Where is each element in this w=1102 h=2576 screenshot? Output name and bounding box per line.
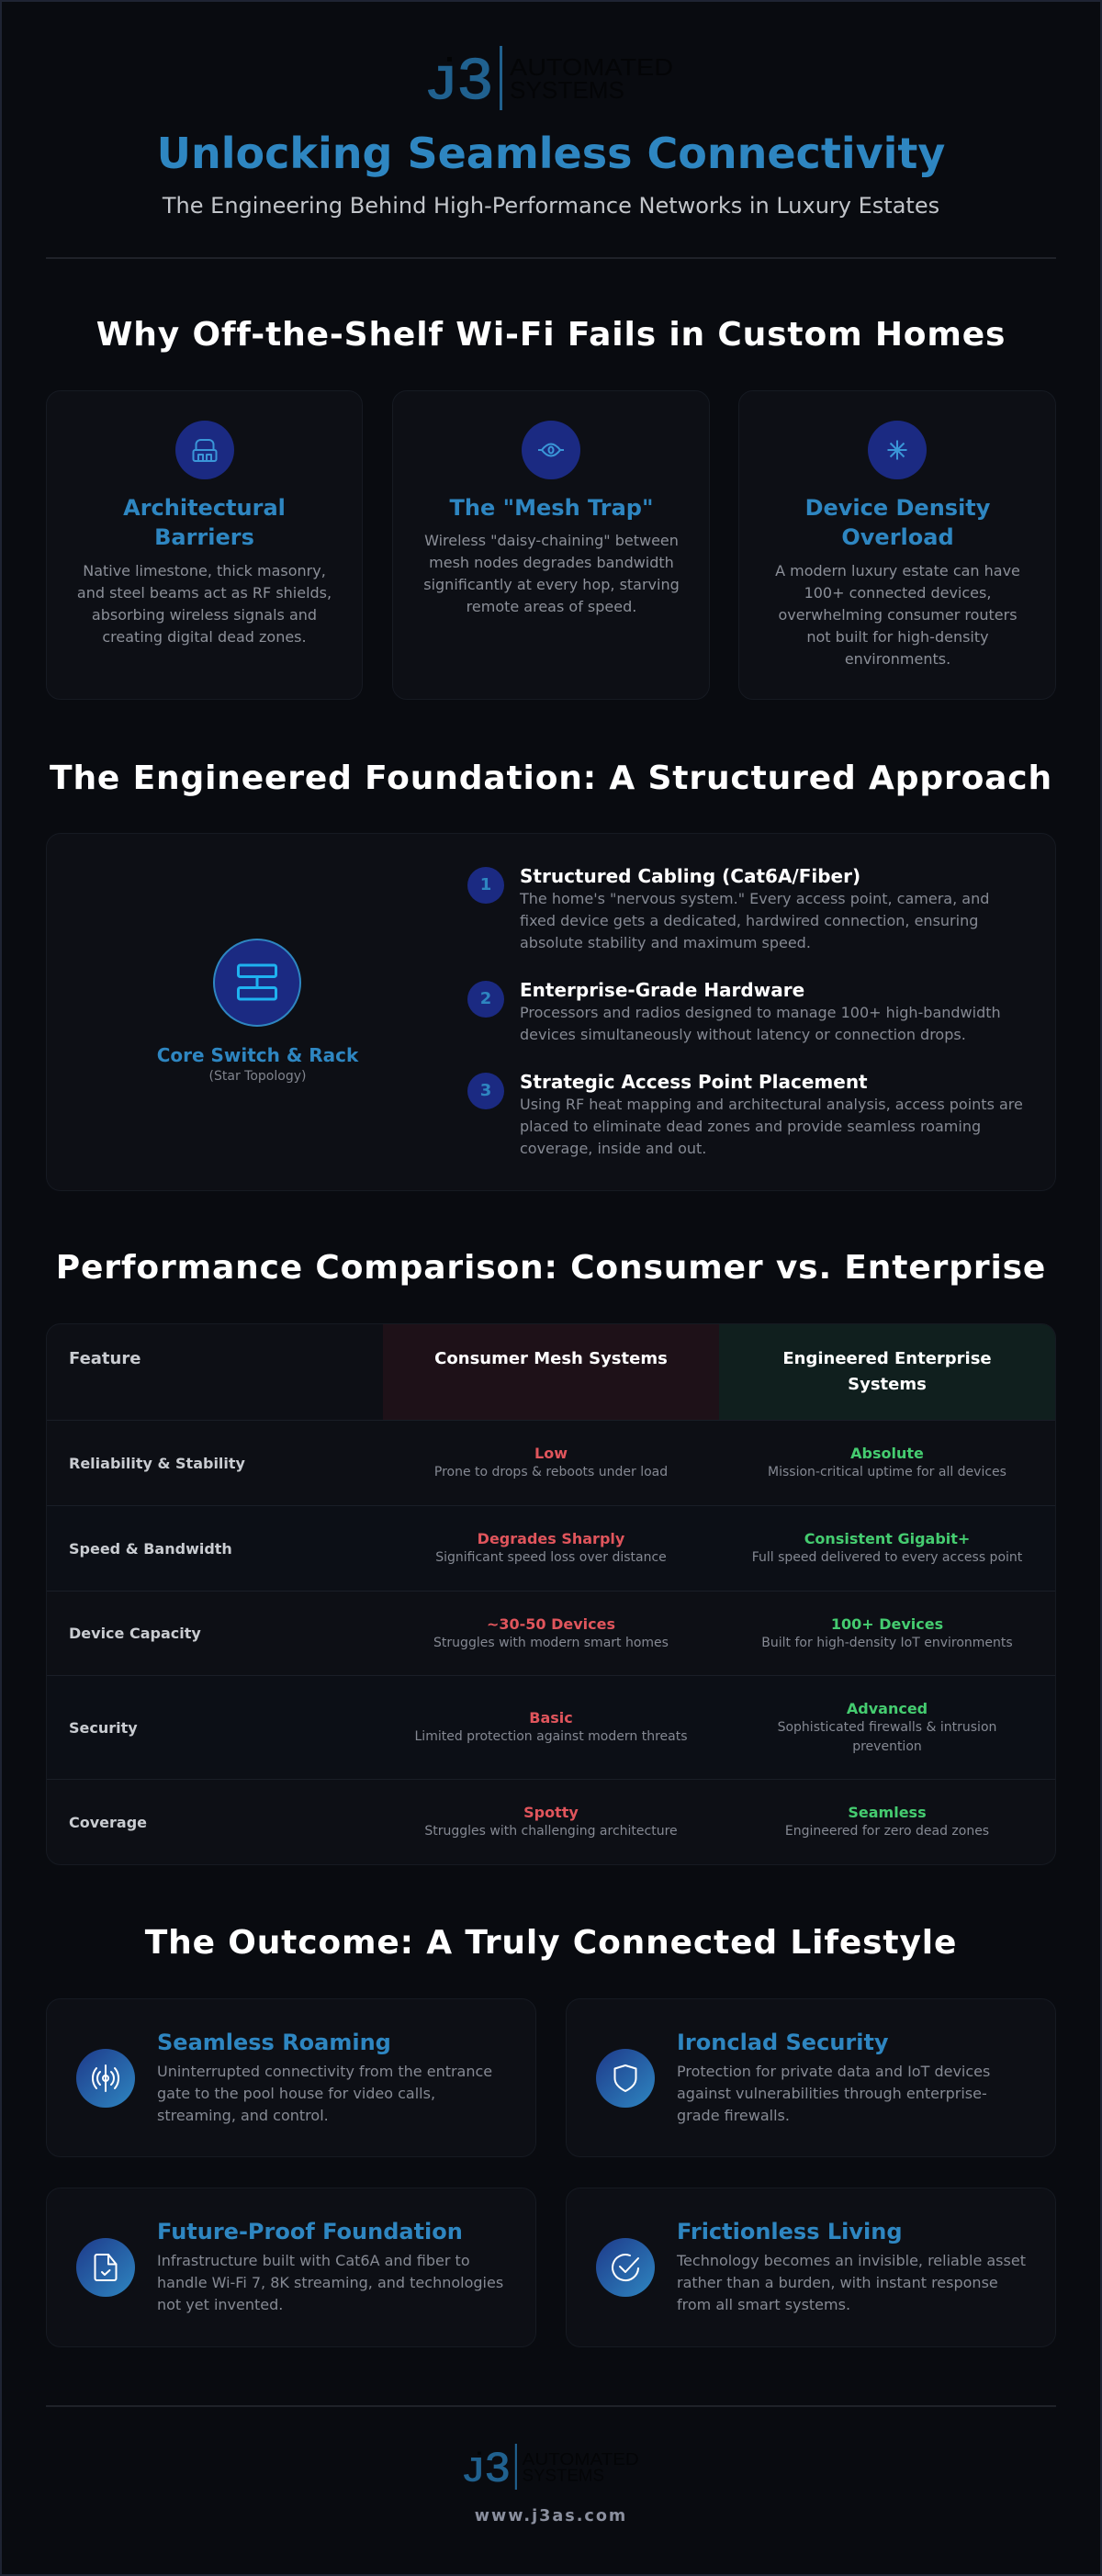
card text: not built for high-density <box>806 628 989 646</box>
card text: significantly at every hop, starving <box>423 576 680 593</box>
card text <box>423 532 680 615</box>
heading: engineered foundation: The Engineered Foundation: A Structured Approach <box>50 759 1052 797</box>
row: security: Sophisticated firewalls & intrusion <box>778 1719 996 1734</box>
step 1 text <box>520 890 989 951</box>
card text: grade firewalls. <box>677 2107 790 2124</box>
icon: eye <box>522 421 580 479</box>
card title: Frictionless Living <box>677 2219 903 2244</box>
panel: architectural barriers <box>46 390 363 700</box>
card title: Barriers <box>154 524 254 550</box>
logo: header: SYSTEMS <box>510 76 624 104</box>
card title: Device Density <box>805 495 990 521</box>
card text: creating digital dead zones. <box>102 628 307 646</box>
card text: against vulnerabilities through enterprise- <box>677 2085 987 2102</box>
card text: Protection for private data and IoT devices <box>677 2063 990 2080</box>
card text: streaming, and control. <box>157 2107 329 2124</box>
panel: seamless roaming <box>46 1998 536 2157</box>
logo: header <box>428 46 673 110</box>
card text: 100+ connected devices, <box>804 584 991 602</box>
table header <box>69 1324 1055 1420</box>
row: security: Basic <box>529 1709 573 1727</box>
card text: rather than a burden, with instant response <box>677 2274 998 2291</box>
step 3 number: 3 <box>480 1081 491 1100</box>
card title <box>805 495 990 550</box>
row: capacity: Struggles with modern smart homes <box>433 1635 669 1649</box>
step 2 number: 2 <box>480 989 491 1008</box>
card title <box>123 495 286 550</box>
row: reliability: Prone to drops & reboots under load <box>434 1465 668 1479</box>
logo: footer: 3 <box>486 2446 510 2490</box>
card title: Overload <box>841 524 954 550</box>
panel: structured approach <box>46 833 1056 1191</box>
row: coverage: Seamless <box>848 1804 927 1821</box>
row: speed: Degrades Sharply <box>478 1530 624 1547</box>
card text: Uninterrupted connectivity from the entrance <box>157 2063 492 2080</box>
card text <box>677 2063 990 2124</box>
row: capacity: Built for high-density IoT environments <box>761 1635 1013 1649</box>
icon: asterisk <box>868 421 927 479</box>
card text: from all smart systems. <box>677 2296 850 2313</box>
step 1 text: fixed device gets a dedicated, hardwired connection, ensuring <box>520 912 978 929</box>
icon: circle check <box>596 2238 655 2297</box>
panel: mesh trap <box>392 390 710 700</box>
step 3 title: Strategic Access Point Placement <box>520 1071 868 1093</box>
row: coverage: Coverage <box>69 1813 147 1831</box>
row: coverage: Engineered for zero dead zones <box>785 1824 989 1839</box>
card text: A modern luxury estate can have <box>775 562 1020 579</box>
card text <box>77 562 332 646</box>
step 3 text: placed to eliminate dead zones and provide seamless roaming <box>520 1118 981 1135</box>
card text: overwhelming consumer routers <box>778 606 1018 624</box>
header: enterprise <box>719 1324 1055 1420</box>
icon: shield <box>596 2049 655 2108</box>
step 2 number <box>467 981 504 1018</box>
row: coverage <box>47 1779 1055 1864</box>
panel: frictionless living <box>566 2188 1056 2347</box>
logo: footer: SYSTEMS <box>523 2466 604 2485</box>
card text <box>157 2063 492 2124</box>
card text: environments. <box>845 650 950 668</box>
card title: The "Mesh Trap" <box>450 495 653 521</box>
step 1 text: absolute stability and maximum speed. <box>520 934 811 951</box>
diagram label: Core Switch & Rack <box>157 1044 358 1066</box>
step 3 number <box>467 1073 504 1109</box>
card text <box>676 2252 1026 2313</box>
card text: mesh nodes degrades bandwidth <box>429 554 674 571</box>
row: speed: Full speed delivered to every access point <box>752 1550 1022 1565</box>
row: coverage: Spotty <box>523 1804 579 1821</box>
logo: footer <box>464 2444 639 2490</box>
logo: header: 3 <box>458 48 492 110</box>
header: feature: Feature <box>69 1349 141 1368</box>
step 2 text <box>520 1004 1001 1043</box>
step 1 text: The home's "nervous system." Every access point, camera, and <box>520 890 989 907</box>
card text: remote areas of speed. <box>467 598 636 615</box>
step 2 text: Processors and radios designed to manage 100+ high-bandwidth <box>520 1004 1001 1021</box>
row: reliability <box>47 1420 1055 1505</box>
card text: gate to the pool house for video calls, <box>157 2085 435 2102</box>
card title: Architectural <box>123 495 286 521</box>
row: speed: Significant speed loss over distance <box>435 1550 667 1565</box>
step 1 title: Structured Cabling (Cat6A/Fiber) <box>520 865 860 887</box>
header: enterprise: Engineered Enterprise <box>782 1349 992 1368</box>
panel: device density <box>738 390 1056 700</box>
row: speed: Consistent Gigabit+ <box>804 1530 970 1547</box>
panel: future-proof foundation <box>46 2188 536 2347</box>
icon: core switch <box>213 939 301 1027</box>
logo: footer: J <box>464 2452 483 2489</box>
step 1 number <box>467 867 504 904</box>
card text: and steel beams act as RF shields, <box>77 584 332 602</box>
step 3 text: Using RF heat mapping and architectural analysis, access points are <box>520 1096 1023 1113</box>
step 2 title: Enterprise-Grade Hardware <box>520 979 804 1001</box>
row: security: Advanced <box>847 1699 928 1717</box>
heading: performance comparison: Performance Comparison: Consumer vs. Enterprise <box>56 1249 1046 1287</box>
row: speed: Speed & Bandwidth <box>69 1539 232 1558</box>
step 1 number: 1 <box>480 875 491 894</box>
card text: Native limestone, thick masonry, <box>83 562 326 579</box>
card text <box>775 562 1020 668</box>
panel: ironclad security <box>566 1998 1056 2157</box>
row: reliability: Mission-critical uptime for all devices <box>768 1465 1006 1479</box>
card text: not yet invented. <box>157 2296 283 2313</box>
icon: document check <box>76 2238 135 2297</box>
logo: header: J <box>428 57 455 108</box>
card text: Wireless "daisy-chaining" between <box>424 532 679 549</box>
header: consumer: Consumer Mesh Systems <box>434 1349 668 1368</box>
step 2 text: devices simultaneously without latency or connection drops. <box>520 1026 966 1043</box>
comparison table <box>46 1323 1056 1865</box>
card title: Ironclad Security <box>677 2030 889 2055</box>
icon: signal <box>76 2049 135 2108</box>
row: capacity: 100+ Devices <box>831 1614 943 1633</box>
row: reliability: Reliability & Stability <box>69 1455 245 1471</box>
heading: outcome: The Outcome: A Truly Connected Lifestyle <box>145 1924 957 1962</box>
row: capacity <box>47 1591 1055 1675</box>
row: capacity: Device Capacity <box>69 1625 201 1642</box>
header: enterprise: Systems <box>848 1375 927 1394</box>
row: reliability: Low <box>534 1445 568 1462</box>
row: coverage: Struggles with challenging architecture <box>424 1824 678 1839</box>
diagram sublabel: (Star Topology) <box>209 1069 306 1084</box>
row: reliability: Absolute <box>850 1445 924 1462</box>
card text: Infrastructure built with Cat6A and fiber to <box>157 2252 470 2269</box>
card title: Seamless Roaming <box>157 2030 391 2055</box>
icon: building <box>175 421 234 479</box>
row: capacity: ~30-50 Devices <box>487 1614 615 1633</box>
footer url: www.j3as.com <box>475 2507 627 2525</box>
heading: why wi-fi fails: Why Off-the-Shelf Wi-Fi Fails in Custom Homes <box>96 316 1006 354</box>
row: security: Security <box>69 1719 138 1736</box>
row: speed <box>47 1505 1055 1591</box>
row: security: Limited protection against modern threats <box>415 1729 687 1744</box>
row: security <box>47 1675 1055 1779</box>
card text: handle Wi-Fi 7, 8K streaming, and technologies <box>157 2274 503 2291</box>
step 3 text <box>520 1096 1023 1157</box>
card title: Future-Proof Foundation <box>157 2219 463 2244</box>
step 3 text: coverage, inside and out. <box>520 1140 706 1157</box>
card text: Technology becomes an invisible, reliable asset <box>677 2252 1026 2269</box>
logo: header: AUTOMATED <box>510 53 673 81</box>
card text <box>157 2252 503 2313</box>
title: Unlocking Seamless Connectivity <box>157 129 945 178</box>
header: consumer <box>383 1324 719 1420</box>
subtitle: The Engineering Behind High-Performance Networks in Luxury Estates <box>163 193 939 219</box>
row: security: prevention <box>852 1739 922 1754</box>
logo: footer: AUTOMATED <box>523 2449 639 2469</box>
card text: absorbing wireless signals and <box>92 606 317 624</box>
